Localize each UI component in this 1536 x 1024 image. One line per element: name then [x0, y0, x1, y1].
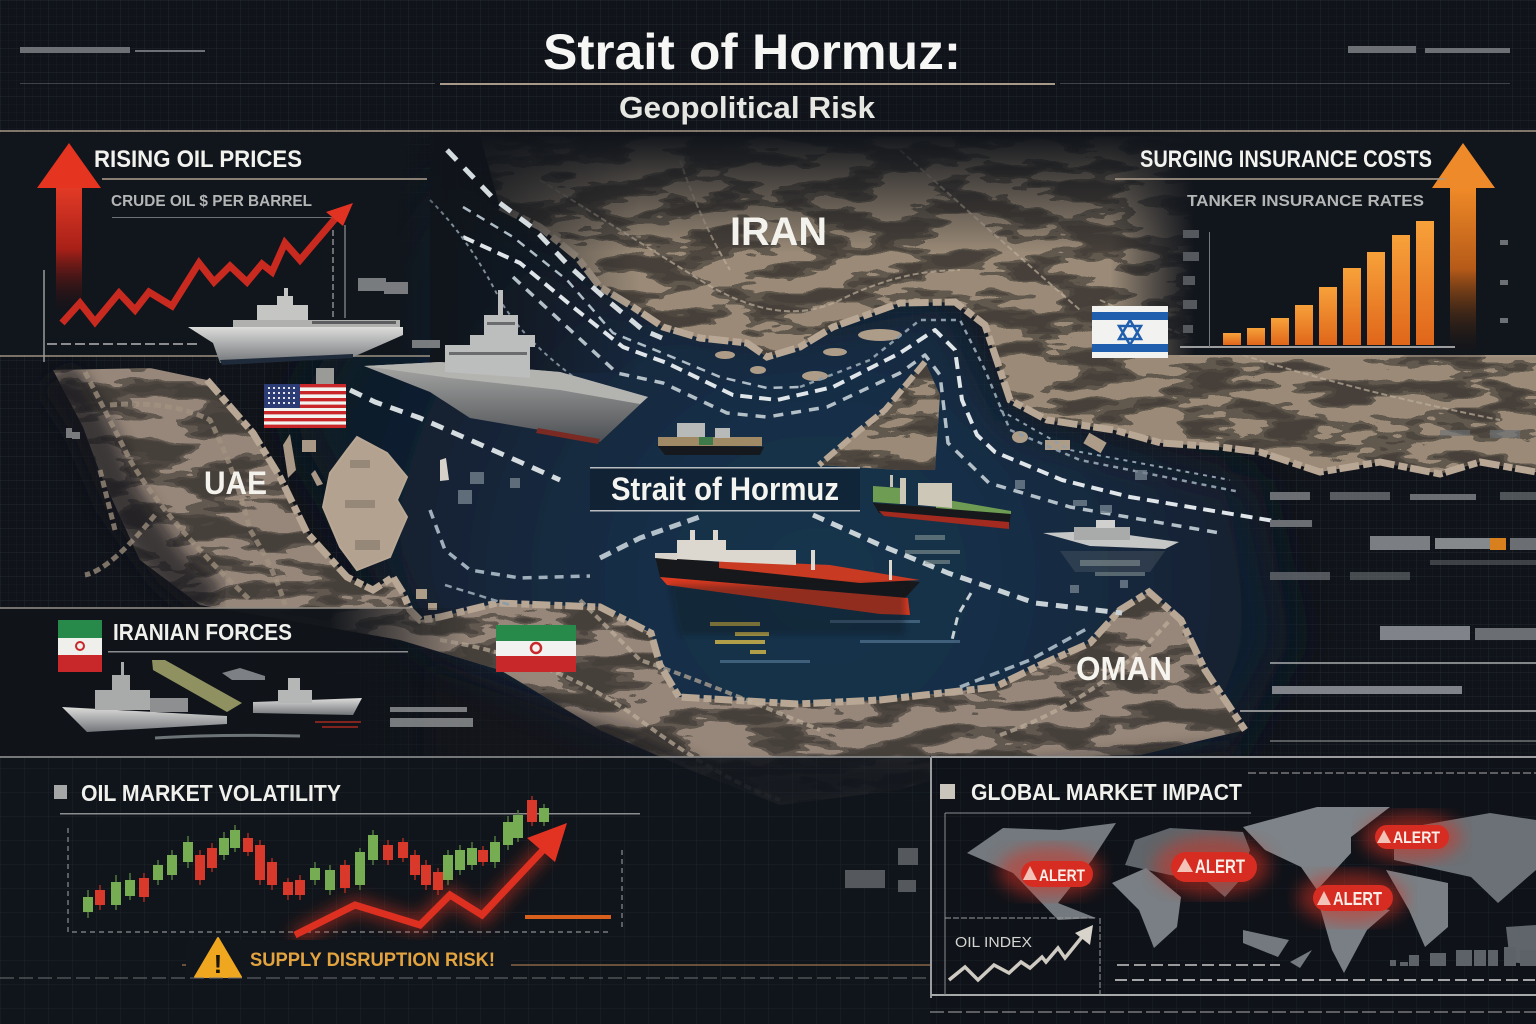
heading: oil market volatility: OIL MARKET VOLATILITY	[81, 780, 341, 806]
ship: red oil tanker	[655, 530, 920, 635]
title: Strait of Hormuz:	[543, 24, 961, 80]
ship: green cargo vessel	[873, 475, 1011, 529]
alert: Middle East	[1154, 836, 1270, 896]
ship: large aircraft carrier	[364, 290, 648, 444]
alert: Middle East: ALERT	[1195, 857, 1245, 878]
icon: market trend arrow	[295, 823, 567, 937]
bar chart: insurance rates	[1180, 221, 1455, 348]
map: gulf water	[290, 170, 1290, 770]
callout: supply disruption risk: SUPPLY DISRUPTION RISK!	[250, 950, 495, 971]
map label: Iran: IRAN	[730, 210, 827, 254]
bars: map mini chart	[1390, 947, 1536, 966]
flag: United States	[264, 368, 346, 428]
world map	[967, 807, 1536, 973]
data blocks: right side	[1240, 430, 1536, 742]
heading: rising oil prices: RISING OIL PRICES	[94, 146, 302, 173]
map label: Strait of Hormuz: Strait of Hormuz	[611, 471, 839, 507]
panel: surging insurance costs	[1110, 133, 1536, 357]
oil index inset	[945, 918, 1100, 995]
panel: Iranian forces	[0, 607, 470, 757]
subheading: crude oil: CRUDE OIL $ PER BARREL	[111, 193, 312, 210]
panel: global market impact	[930, 757, 1536, 1024]
icon: small boat	[222, 668, 265, 680]
map: central peninsula	[819, 362, 940, 470]
heading: global market impact: GLOBAL MARKET IMPACT	[971, 779, 1242, 805]
ship: grey patrol boat	[1043, 520, 1179, 572]
map: shipping routes	[350, 150, 1280, 687]
subheading: tanker insurance rates: TANKER INSURANCE RATES	[1187, 193, 1424, 210]
panel: rising oil prices	[0, 133, 450, 362]
title: Geopolitical Risk	[619, 90, 876, 125]
oil index inset: OIL INDEX	[955, 934, 1032, 951]
flag: Israel	[1092, 306, 1168, 358]
alert: South America: ALERT	[1333, 889, 1382, 909]
data blocks: water markers	[458, 470, 1147, 593]
alert: Europe	[1362, 813, 1462, 861]
ship: small cargo vessel	[657, 423, 764, 455]
map: coastal islets	[416, 329, 1107, 610]
icon: orange up arrow	[1432, 143, 1495, 350]
heading: surging insurance costs: SURGING INSURANCE COSTS	[1140, 146, 1432, 173]
ship: upper aircraft carrier	[188, 288, 403, 365]
water reflections	[710, 535, 1145, 663]
line chart: oil price	[47, 203, 353, 344]
alert: North America: ALERT	[1039, 866, 1085, 885]
icon: missile launcher	[152, 660, 242, 712]
ship: Iranian patrol boat	[253, 678, 362, 715]
panel: oil market volatility	[0, 756, 930, 1024]
alert: South America	[1298, 872, 1406, 924]
map: island	[283, 434, 407, 570]
header decorations	[0, 46, 1536, 132]
flag: Iran	[496, 625, 576, 672]
candlestick chart	[68, 796, 622, 932]
callout: supply disruption risk: !	[214, 949, 222, 979]
alert: Europe: ALERT	[1393, 828, 1441, 847]
map label: Oman: OMAN	[1076, 650, 1172, 687]
data blocks: map centre	[66, 278, 473, 727]
heading: Iranian forces: IRANIAN FORCES	[113, 619, 292, 645]
map: Iran landmass	[430, 133, 1536, 474]
map: UAE and Oman landmass	[53, 368, 1245, 805]
callout: supply disruption risk	[182, 938, 930, 980]
icon: Iran small flag	[58, 620, 102, 672]
ship: Iranian frigate	[62, 662, 227, 732]
alert: North America	[998, 846, 1102, 898]
icon: red up arrow	[37, 143, 101, 310]
map label: UAE: UAE	[204, 465, 267, 501]
title	[440, 24, 1055, 125]
